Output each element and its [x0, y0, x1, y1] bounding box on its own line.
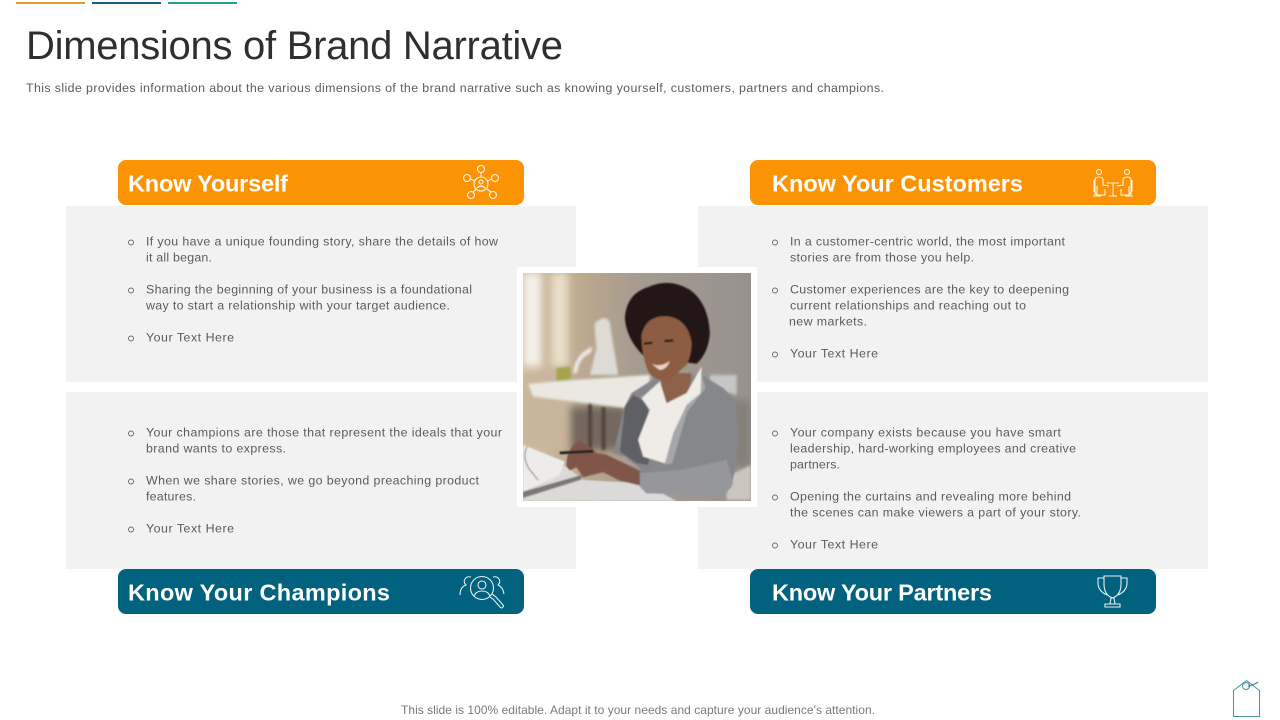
hair — [625, 283, 710, 364]
face — [642, 316, 692, 381]
panel: know your champions: features. — [146, 490, 196, 504]
hands — [566, 441, 640, 486]
panel: know your partners: partners. — [790, 458, 840, 472]
panel: know your partners: Opening the curtains and revealing more behind — [790, 490, 1071, 504]
panel: know your champions: Your champions are those that represent the ideals that your — [146, 426, 502, 440]
panel: know yourself: it all began. — [146, 250, 212, 264]
photo frame — [517, 267, 757, 507]
panel: know your champions: brand wants to express. — [146, 442, 286, 456]
panel: know your partners: Your company exists because you have smart — [790, 426, 1062, 440]
icon: two people at table — [1093, 170, 1133, 196]
panel: know your partners: leadership, hard-working employees and creative — [790, 442, 1076, 456]
panel: know your customers: current relationships and reaching out to — [790, 298, 1026, 312]
header: know your partners — [750, 569, 1156, 614]
header: know your champions — [118, 569, 524, 614]
panel: know your champions: Your Text Here — [146, 522, 234, 536]
footer note: This slide is 100% editable. Adapt it to your needs and capture your audience's attention. — [401, 703, 875, 717]
panel: know your customers — [698, 206, 1208, 382]
panel: know your partners — [698, 392, 1208, 569]
title: Dimensions of Brand Narrative — [26, 24, 563, 68]
panel: know yourself: If you have a unique founding story, share the details of how — [146, 234, 498, 248]
panel: know your partners: Your Text Here — [790, 538, 878, 552]
body — [613, 375, 738, 495]
blouse — [638, 366, 702, 463]
header: know your champions: Know Your Champions — [128, 580, 390, 606]
header: know yourself — [118, 160, 524, 205]
panel: know your customers: stories are from those you help. — [790, 250, 974, 264]
header: know your partners: Know Your Partners — [772, 580, 992, 606]
header: know your customers: Know Your Customers — [772, 170, 1023, 196]
panel: know your champions: When we share stories, we go beyond preaching product — [146, 474, 480, 488]
panel: know yourself: way to start a relationship with your target audience. — [145, 298, 450, 312]
photo: businesswoman at desk — [523, 273, 751, 501]
icon: network — [464, 166, 498, 198]
header: know your customers — [750, 160, 1156, 205]
header: know yourself: Know Yourself — [128, 170, 288, 196]
panel: know your champions — [66, 392, 576, 569]
icon: people magnifier — [460, 576, 504, 608]
panel: know yourself: Your Text Here — [146, 330, 234, 344]
panel: know your customers: Your Text Here — [790, 346, 878, 360]
panel: know yourself: Sharing the beginning of your business is a foundational — [146, 282, 472, 296]
panel: know your partners: the scenes can make viewers a part of your story. — [790, 506, 1081, 520]
panel: know yourself — [66, 206, 576, 382]
icon: trophy — [1098, 576, 1127, 607]
icon: price tag — [1234, 680, 1260, 716]
subtitle: This slide provides information about the various dimensions of the brand narrative such as knowing yourself, customers, partners and champions. — [26, 81, 884, 95]
neck — [662, 373, 692, 412]
panel: know your customers: Customer experiences are the key to deepening — [790, 282, 1069, 296]
panel: know your customers: In a customer-centric world, the most important — [790, 234, 1066, 248]
panel: know your customers: new markets. — [789, 314, 867, 328]
table and papers — [523, 457, 677, 501]
top accent bars — [16, 2, 237, 4]
